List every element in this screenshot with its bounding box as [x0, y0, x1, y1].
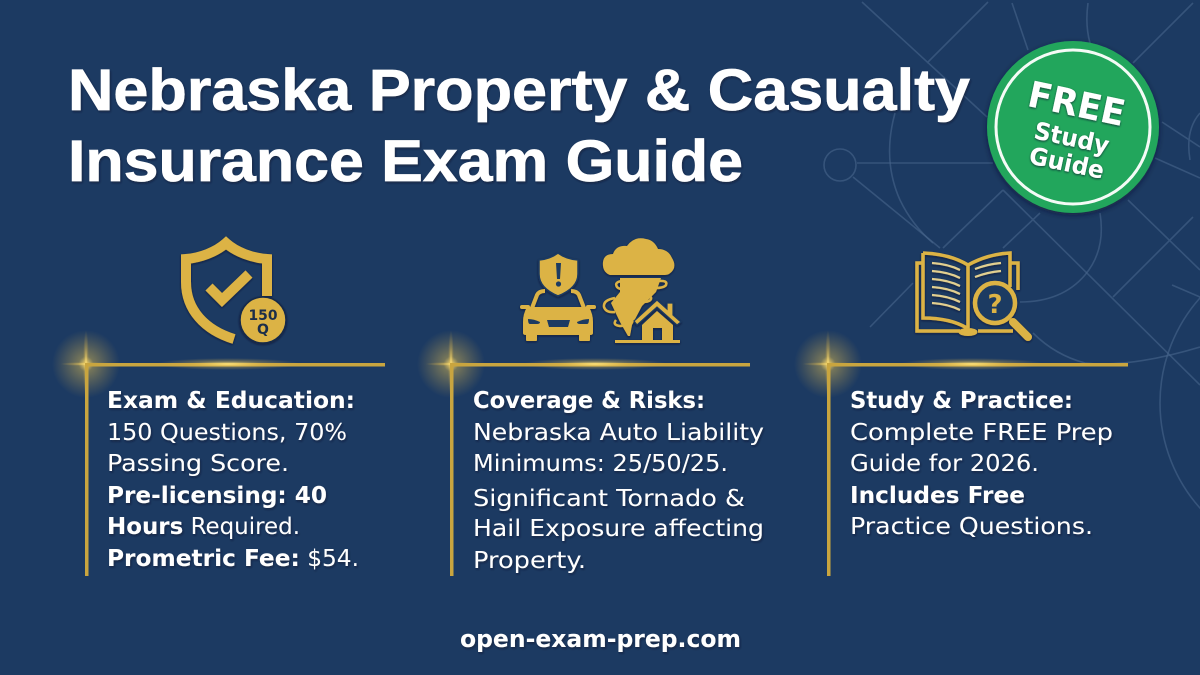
column 2 text: coverage and risks: Significant Tornado &	[473, 486, 745, 512]
background pattern	[824, 2, 1200, 561]
column 2 text: coverage and risks: Hail Exposure affecting	[473, 516, 764, 542]
badge: free study guide	[987, 41, 1159, 213]
column 1 text: exam and education: Prometric Fee: $54.	[107, 546, 359, 572]
badge: free study guide: FREE	[1024, 75, 1129, 135]
title	[68, 58, 970, 194]
column 1 text: exam and education: Passing Score.	[107, 451, 289, 477]
column 2 text: coverage and risks: Nebraska Auto Liability	[473, 420, 764, 446]
icon: open book with magnifier: ?	[987, 290, 1003, 320]
column 1 text: exam and education: Pre-licensing: 40	[107, 483, 327, 509]
column 3 text: study and practice	[850, 388, 1113, 540]
title: Insurance Exam Guide	[68, 129, 743, 194]
column 3 rule	[794, 330, 1128, 576]
column 1 text: exam and education: Hours Required.	[107, 514, 300, 540]
column 3 text: study and practice: Guide for 2026.	[850, 451, 1039, 477]
column 1 rule	[52, 330, 385, 576]
column 3 text: study and practice: Includes Free	[850, 483, 1025, 509]
icon: storm cloud, tornado and house	[603, 238, 681, 343]
footer url: open-exam-prep.com	[460, 625, 741, 653]
column 2 text: coverage and risks: Property.	[473, 548, 586, 574]
column 2 text: coverage and risks: Coverage & Risks:	[473, 388, 705, 414]
icon: shield with check and 150 Q: 150	[248, 308, 278, 324]
icon: open book with magnifier	[917, 253, 1028, 337]
column 2 text: coverage and risks: Minimums: 25/50/25.	[473, 451, 728, 477]
column 2 rule	[417, 330, 750, 576]
column 1 text: exam and education	[107, 388, 359, 572]
icon: car with warning shield	[520, 253, 596, 341]
column 3 text: study and practice: Study & Practice:	[850, 388, 1073, 414]
title: Nebraska Property & Casualty	[68, 58, 970, 123]
column 3 text: study and practice: Complete FREE Prep	[850, 420, 1113, 446]
column 3 text: study and practice: Practice Questions.	[850, 514, 1093, 540]
column 2 text: coverage and risks	[473, 388, 764, 574]
icon: shield with check and 150 Q	[186, 243, 286, 343]
icon: shield with check and 150 Q: Q	[257, 322, 269, 338]
badge: free study guide: Guide	[1027, 142, 1107, 185]
column 1 text: exam and education: 150 Questions, 70%	[107, 420, 347, 446]
column 1 text: exam and education: Exam & Education:	[107, 388, 355, 414]
badge: free study guide: Study	[1032, 117, 1112, 160]
